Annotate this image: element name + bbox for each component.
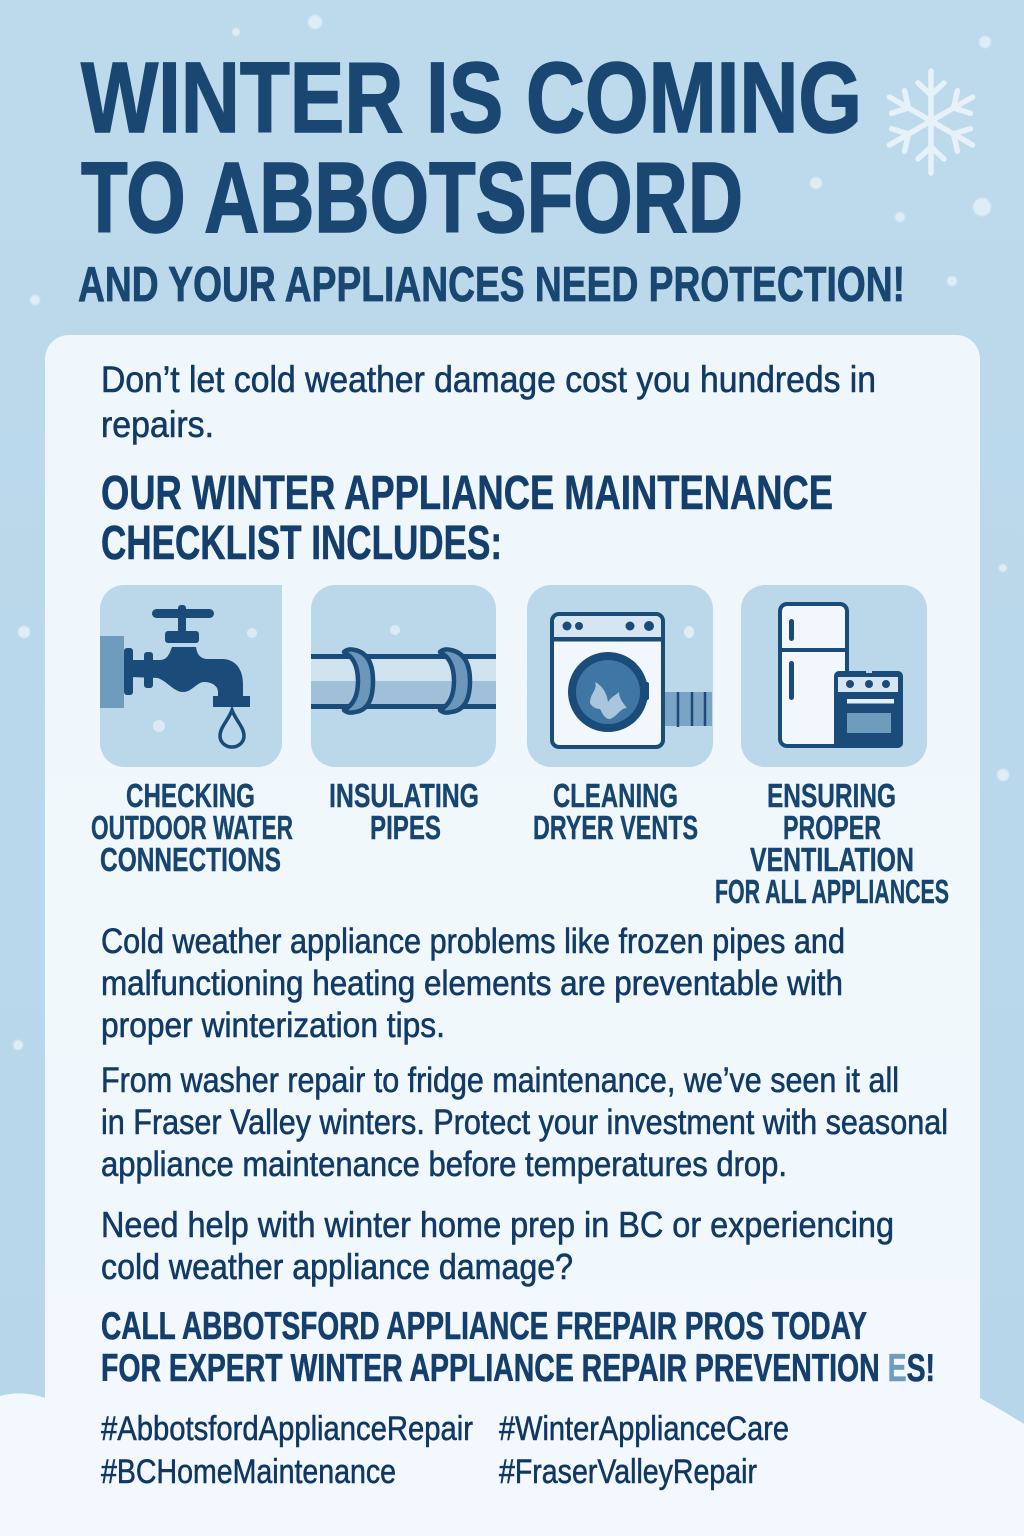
- paragraph: cold weather problems: Cold weather appliance problems like frozen pipes and: [101, 922, 845, 961]
- paragraph: cold weather problems: malfunctioning heating elements are preventable with: [101, 964, 843, 1003]
- hashtags: #WinterApplianceCare: [499, 1410, 789, 1448]
- snowfall dots: [13, 15, 1009, 1050]
- icon: dryer with vent: [527, 585, 713, 767]
- label: checking outdoor water connections: [91, 777, 293, 878]
- paragraph: cold weather problems: proper winterization tips.: [101, 1006, 445, 1045]
- call to action: [101, 1305, 935, 1390]
- label: cleaning dryer vents: CLEANING: [553, 777, 678, 814]
- hashtags: #BCHomeMaintenance: [101, 1453, 396, 1491]
- checklist heading: CHECKLIST INCLUDES:: [101, 517, 502, 570]
- label: ensuring proper ventilation: ENSURING: [767, 777, 896, 814]
- label: insulating pipes: PIPES: [370, 809, 441, 846]
- paragraph: need help: Need help with winter home prep in BC or experiencing: [101, 1204, 894, 1245]
- label: ensuring proper ventilation: VENTILATION: [750, 841, 914, 878]
- panel: main content card: [45, 335, 980, 1536]
- paragraph: cold weather problems: [101, 922, 845, 1045]
- label: insulating pipes: [329, 777, 479, 846]
- label: checking outdoor water connections: CHECKING: [126, 777, 255, 814]
- icon: insulated pipe: [311, 585, 496, 767]
- paragraph: fraser valley winters: From washer repair to fridge maintenance, we’ve seen it all: [101, 1061, 899, 1100]
- title: [81, 42, 862, 254]
- snow drift: [0, 1393, 1024, 1536]
- icon: fridge and stove: [741, 585, 927, 767]
- intro text: Don’t let cold weather damage cost you hundreds in: [101, 359, 876, 400]
- checklist heading: [101, 467, 833, 570]
- label: checking outdoor water connections: OUTDOOR WATER: [91, 809, 293, 846]
- snowflake icon: [883, 71, 979, 173]
- hashtags: [101, 1410, 789, 1491]
- hashtags: #AbbotsfordApplianceRepair: [101, 1410, 473, 1448]
- intro text: repairs.: [101, 404, 214, 445]
- paragraph: fraser valley winters: [101, 1061, 948, 1184]
- hashtags: #FraserValleyRepair: [499, 1453, 757, 1491]
- label: ensuring proper ventilation: [715, 777, 949, 910]
- paragraph: fraser valley winters: appliance maintenance before temperatures drop.: [101, 1145, 787, 1184]
- label: cleaning dryer vents: DRYER VENTS: [533, 809, 698, 846]
- label: checking outdoor water connections: CONNECTIONS: [100, 841, 281, 878]
- label: ensuring proper ventilation: PROPER: [783, 809, 881, 846]
- paragraph: need help: [101, 1204, 894, 1287]
- label: insulating pipes: INSULATING: [329, 777, 479, 814]
- intro text: [101, 359, 876, 445]
- label: cleaning dryer vents: [533, 777, 698, 846]
- title: WINTER IS COMING: [81, 42, 862, 154]
- icon: outdoor faucet: [100, 585, 282, 767]
- paragraph: need help: cold weather appliance damage?: [101, 1246, 573, 1287]
- title: TO ABBOTSFORD: [81, 142, 743, 254]
